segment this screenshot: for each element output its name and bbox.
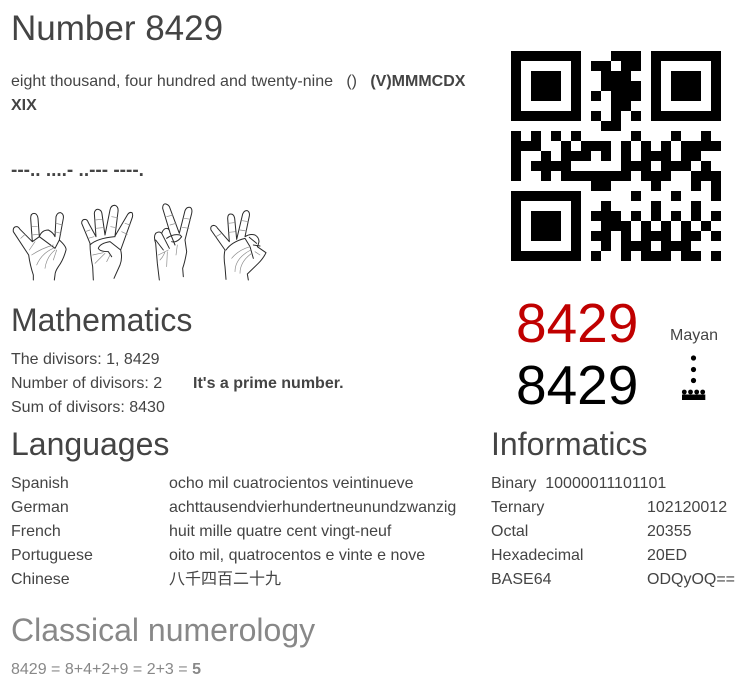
Mayan label: Mayan <box>670 327 718 344</box>
heading: Mathematics: Mathematics <box>11 302 192 338</box>
divisors text block <box>11 351 165 416</box>
informatics labels: BASE64 <box>491 571 551 588</box>
language names: Chinese <box>11 571 70 588</box>
prime number note: It's a prime number. <box>193 375 344 392</box>
heading: Classical numerology: Classical numerology <box>11 612 315 648</box>
number in other languages: ocho mil cuatrocientos veintinueve <box>169 475 414 492</box>
divisors text block: Sum of divisors: 8430 <box>11 399 165 416</box>
number in other languages: achttausendvierhundertneunundzwanzig <box>169 499 456 516</box>
informatics labels: Hexadecimal <box>491 547 583 564</box>
red number: 8429 <box>516 292 638 354</box>
hand 8 <box>13 213 66 280</box>
number in words and roman numeral: XIX <box>11 97 37 114</box>
numerology calculation: 8429 = 8+4+2+9 = 2+3 = 5 <box>11 661 201 678</box>
number in other languages: 八千四百二十九 <box>169 571 281 588</box>
number in other languages: oito mil, quatrocentos e vinte e nove <box>169 547 425 564</box>
number in words and roman numeral <box>11 73 466 114</box>
informatics labels: Ternary <box>491 499 544 516</box>
number in other languages <box>169 475 456 588</box>
number in other languages: huit mille quatre cent vingt-neuf <box>169 523 391 540</box>
language names: Spanish <box>11 475 69 492</box>
morse code: ---.. ....- ..--- ----. <box>11 160 144 181</box>
language names: German <box>11 499 69 516</box>
title: Number 8429 <box>11 9 223 48</box>
informatics values: ODQyOQ== <box>647 571 735 588</box>
icon: sign language hands <box>12 203 266 280</box>
icon: Mayan numeral <box>682 355 706 400</box>
informatics values: 20355 <box>647 523 692 540</box>
hand 2 <box>154 204 192 280</box>
language names <box>11 475 93 588</box>
informatics values: 102120012 <box>647 499 727 516</box>
binary row: Binary 10000011101101 <box>491 475 666 492</box>
hand 9 <box>211 211 266 280</box>
QR code <box>511 51 721 261</box>
informatics labels <box>491 499 583 588</box>
divisors text block: The divisors: 1, 8429 <box>11 351 160 368</box>
informatics labels: Octal <box>491 523 528 540</box>
informatics values: 20ED <box>647 547 687 564</box>
black number: 8429 <box>516 354 638 416</box>
heading: Informatics: Informatics <box>491 426 647 462</box>
divisors text block: Number of divisors: 2 <box>11 375 162 392</box>
language names: French <box>11 523 61 540</box>
number in words and roman numeral: eight thousand, four hundred and twenty-nine () (V)MMMCDX <box>11 73 465 90</box>
language names: Portuguese <box>11 547 93 564</box>
informatics values <box>647 499 735 588</box>
hand 4 <box>82 205 133 280</box>
heading: Languages: Languages <box>11 426 169 462</box>
